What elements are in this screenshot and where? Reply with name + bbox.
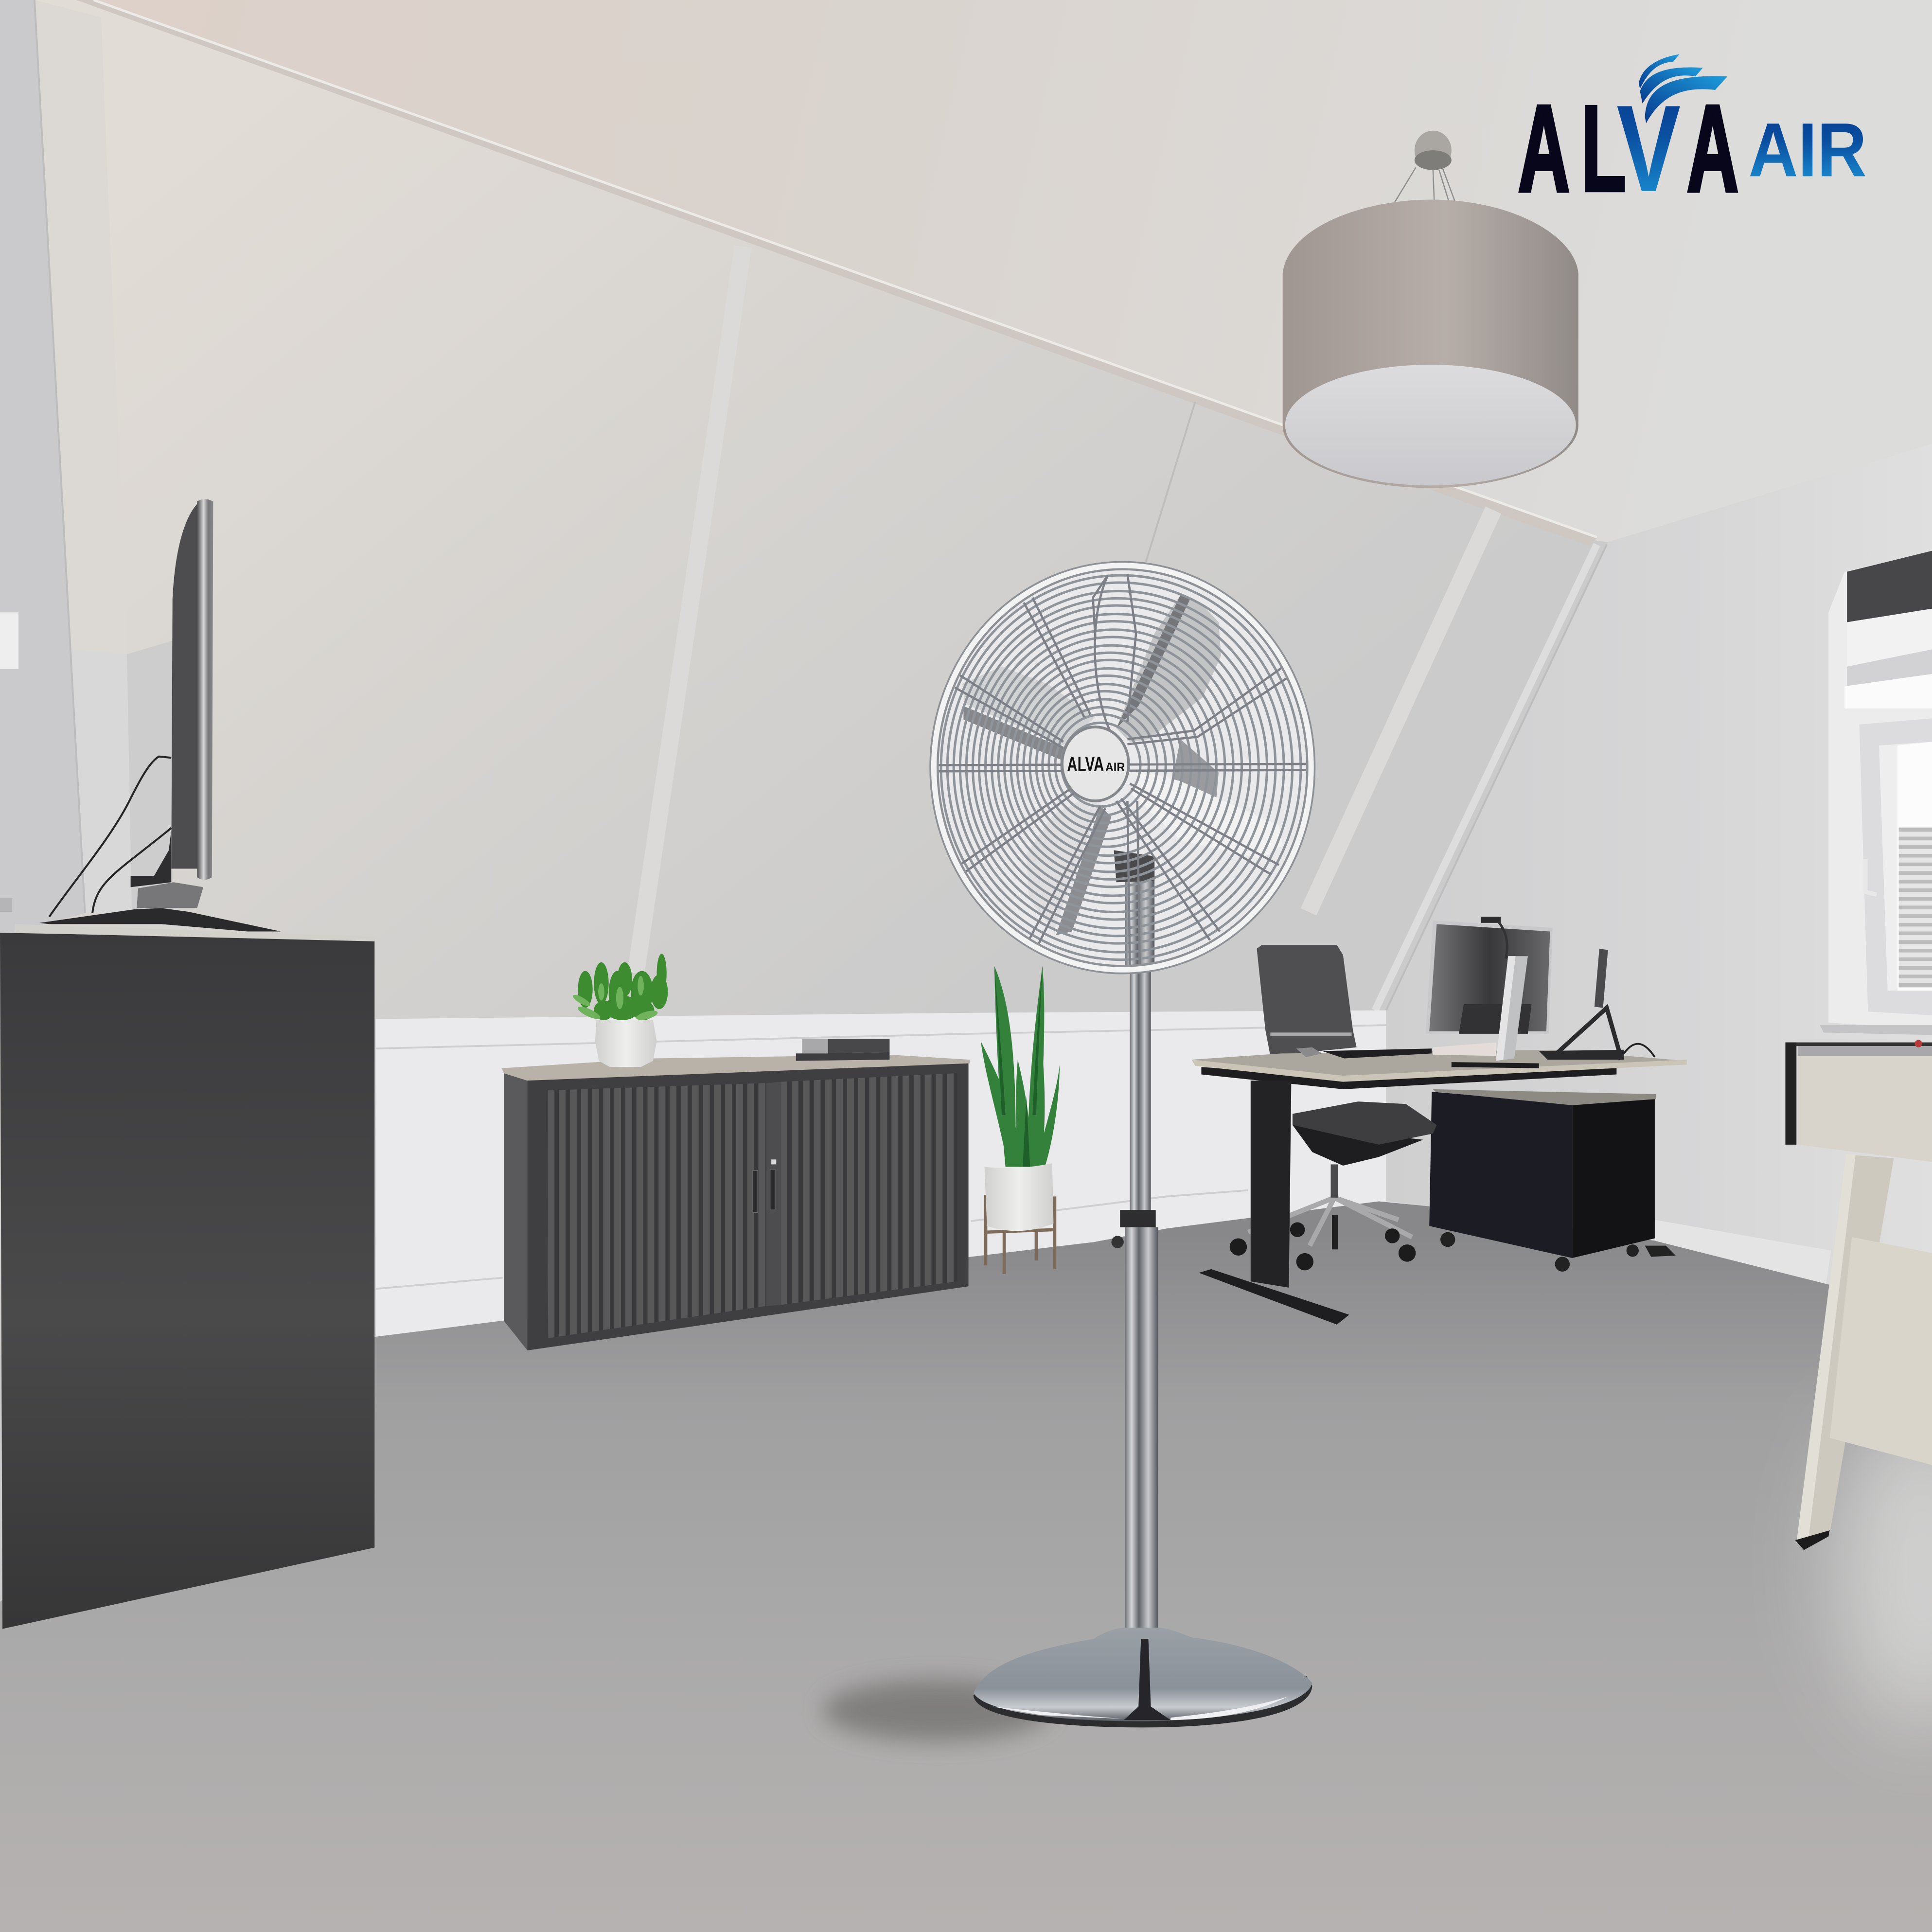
wall socket: [0, 612, 18, 669]
back glow: [933, 564, 1312, 971]
chair back: [1257, 945, 1357, 1056]
desk frame: [1201, 1067, 1616, 1089]
pane: [1879, 742, 1932, 991]
webcam: [1481, 917, 1501, 923]
right wall: [1386, 443, 1932, 1309]
cables: [49, 757, 171, 917]
pot: [595, 1020, 657, 1067]
right table: [1785, 1040, 1932, 1550]
left door: [546, 1083, 765, 1338]
left cabinet: [0, 924, 374, 1629]
shadow behind TV: [127, 641, 173, 913]
TV pedestal: [137, 882, 203, 908]
blade: upper right: [1117, 595, 1221, 742]
papers: [1433, 1043, 1496, 1056]
middle tambour cabinet: [501, 1055, 970, 1350]
leaves: [578, 954, 668, 1020]
sill: [1820, 1025, 1932, 1035]
shade: [1283, 199, 1578, 488]
brand logo: L: [1581, 80, 1627, 217]
keyboard and mouse: [1296, 1047, 1432, 1059]
wires: [1395, 168, 1455, 202]
blade: left: [962, 667, 1096, 760]
chair seat: [1293, 1101, 1436, 1145]
wheels: [1440, 1232, 1455, 1247]
table front: [1798, 1056, 1932, 1162]
snake plant: [981, 966, 1060, 1274]
ceiling mount: [1415, 131, 1452, 170]
fan base: [974, 1628, 1312, 1727]
left wall: [0, 0, 85, 937]
cabinet side: [504, 1073, 527, 1350]
door divider: [766, 1082, 781, 1306]
hub badge: [1062, 727, 1129, 801]
fan head: [930, 562, 1315, 974]
desk drawer unit: [1429, 1089, 1676, 1272]
potted plant on cabinet: [571, 954, 668, 1067]
desk foot right: [1645, 1246, 1676, 1257]
blind: [1847, 551, 1932, 622]
grille rings: [941, 575, 1301, 960]
TV bezel: [197, 499, 213, 880]
hub badge: AIR: [1105, 761, 1125, 774]
table side panel: [1830, 1237, 1932, 1465]
recessed lower panel: [71, 649, 132, 913]
desk: [1191, 1050, 1687, 1325]
monitor: [1426, 917, 1553, 1068]
cabinet top: [501, 1055, 970, 1081]
monitor stand: [1459, 1004, 1532, 1034]
wall seams: [636, 247, 1493, 974]
window handle: [1865, 859, 1877, 895]
fan pole upper: [1130, 969, 1151, 1221]
floor: [0, 1201, 1932, 1932]
brand logo: [1518, 54, 1867, 217]
fan shadow: [823, 1680, 1050, 1741]
silver pillar: [1496, 956, 1528, 1061]
base reflection: [1124, 1639, 1170, 1720]
key: [771, 1159, 776, 1164]
brand logo: A: [1687, 80, 1738, 217]
left skirting lines: [376, 1190, 1248, 1289]
TV feet: [39, 908, 281, 932]
table top edge: [1785, 1043, 1932, 1046]
table bracket: [1785, 1043, 1796, 1145]
stand fan: [930, 562, 1315, 1727]
chair mechanism: [1293, 1125, 1423, 1166]
desk leg: [1251, 1081, 1291, 1288]
logo text ALVA: A: [1518, 80, 1570, 217]
TV back: [171, 504, 197, 869]
cabinet frame: [527, 1062, 969, 1350]
sash: [1860, 718, 1932, 1015]
books: [796, 1039, 889, 1061]
blade: lower right: [1133, 770, 1283, 859]
laptop: [1539, 949, 1655, 1060]
office chair: [1230, 945, 1436, 1270]
brand logo: V: [1616, 80, 1681, 217]
right skirting: [1655, 1220, 1831, 1284]
hub text: ALVA: [1067, 753, 1104, 776]
neck and motor: [1125, 863, 1154, 967]
desk foot: [1199, 1269, 1349, 1325]
ceiling: [80, 0, 1932, 542]
logo wing: [1639, 54, 1727, 123]
red ball: [1915, 1040, 1922, 1047]
diffuser: [1285, 365, 1576, 485]
left wall panel: [35, 0, 127, 654]
chair casters: [1230, 1238, 1247, 1256]
right door: [781, 1073, 957, 1305]
handles: [753, 1170, 758, 1212]
cabinet top: [15, 924, 374, 941]
floor light patch: [1836, 1405, 1932, 1725]
plant stand: [986, 1195, 1055, 1274]
blade: lower left: [1027, 798, 1111, 935]
table leg: [1796, 1154, 1894, 1542]
window: [1820, 551, 1932, 1035]
TV neck: [131, 831, 171, 887]
monitor base: [1452, 1062, 1539, 1068]
TV: [39, 499, 281, 932]
wall knob: [0, 898, 12, 912]
desk top: [1191, 1050, 1687, 1077]
planter: [985, 1163, 1053, 1231]
pendant lamp: [1283, 131, 1578, 488]
grille spokes: [934, 574, 1309, 965]
chair lumbar: [1270, 1032, 1352, 1036]
outer rim: [934, 566, 1311, 970]
chair base: [1248, 1198, 1412, 1246]
drawer top panel: [1433, 1089, 1656, 1105]
slanted wall: [0, 0, 1932, 1355]
reveal: [1828, 551, 1932, 1029]
cable clutter: [1539, 1050, 1624, 1060]
lower white wall band: [376, 1010, 1429, 1343]
table foot: [1795, 1530, 1830, 1550]
logo text AIR: AIR: [1748, 107, 1867, 193]
height collar: [1120, 1210, 1156, 1227]
shutters outside: [1899, 827, 1932, 988]
fan pole lower: [1125, 1227, 1158, 1634]
ceiling beam: [76, 0, 1597, 546]
